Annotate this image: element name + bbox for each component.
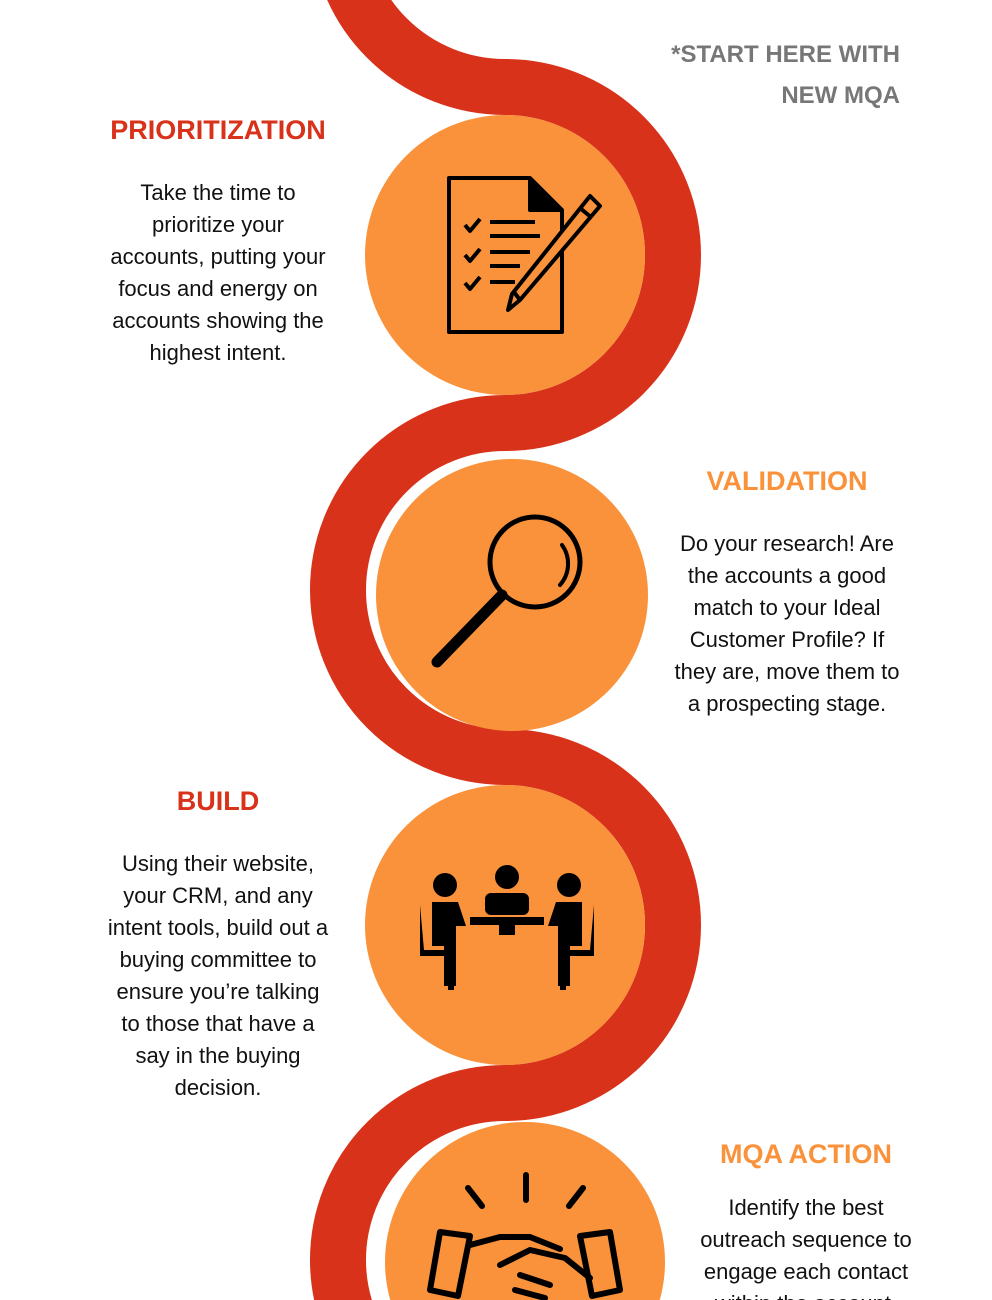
- circle 3: [365, 785, 645, 1065]
- text: mqa action: engage each contact: [704, 1259, 908, 1284]
- heading: build: BUILD: [177, 786, 259, 816]
- start note: NEW MQA: [781, 82, 900, 109]
- text: validation: they are, move them to: [674, 659, 900, 684]
- heading: prioritization: PRIORITIZATION: [110, 115, 326, 145]
- text: mqa action: Identify the best: [728, 1195, 884, 1220]
- circle 2: [376, 459, 648, 731]
- start note: [671, 41, 900, 109]
- text: prioritization: accounts showing the: [112, 308, 324, 333]
- circle 1: [365, 115, 645, 395]
- icon: magnifier: [437, 517, 580, 662]
- text: validation: [674, 531, 900, 716]
- text: validation: match to your Ideal: [693, 595, 881, 620]
- icon: meeting people: [420, 865, 594, 990]
- text: build: decision.: [175, 1075, 261, 1100]
- text: build: [108, 851, 328, 1100]
- icon: checklist with pen: [449, 178, 600, 332]
- text: prioritization: Take the time to: [140, 180, 296, 205]
- text: mqa action: outreach sequence to: [700, 1227, 912, 1252]
- heading: validation: VALIDATION: [706, 466, 868, 496]
- text: build: your CRM, and any: [123, 883, 313, 908]
- text: build: intent tools, build out a: [108, 915, 328, 940]
- text: build: Using their website,: [122, 851, 314, 876]
- text: validation: Customer Profile? If: [690, 627, 884, 652]
- text: prioritization: [110, 180, 326, 365]
- text: prioritization: highest intent.: [150, 340, 286, 365]
- text: validation: Do your research! Are: [680, 531, 894, 556]
- text: build: say in the buying: [135, 1043, 301, 1068]
- text: prioritization: accounts, putting your: [110, 244, 326, 269]
- text: build: to those that have a: [121, 1011, 315, 1036]
- text: prioritization: focus and energy on: [118, 276, 318, 301]
- text: prioritization: prioritize your: [152, 212, 284, 237]
- start note: *START HERE WITH: [671, 41, 900, 68]
- text: build: ensure you’re talking: [116, 979, 320, 1004]
- heading: mqa action: MQA ACTION: [720, 1139, 892, 1169]
- text: validation: the accounts a good: [688, 563, 886, 588]
- text: validation: a prospecting stage.: [688, 691, 886, 716]
- icon: handshake: [430, 1175, 620, 1298]
- text: mqa action: [700, 1195, 912, 1300]
- red snake path: [338, 0, 673, 1300]
- text: build: buying committee to: [120, 947, 316, 972]
- circle 4: [385, 1122, 665, 1300]
